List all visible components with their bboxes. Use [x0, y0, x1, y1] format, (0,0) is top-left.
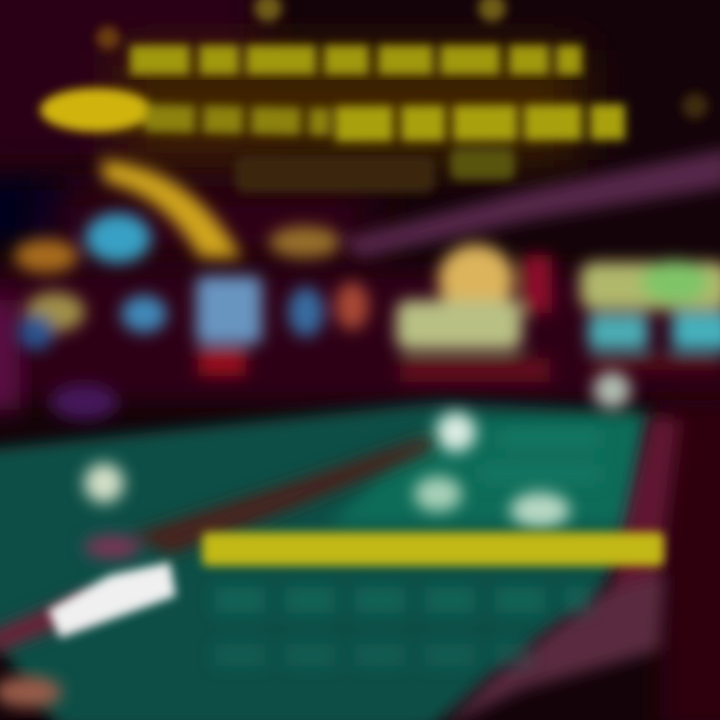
- green table felt: [0, 402, 650, 720]
- title line one, illegible blurred lettering: [96, 0, 582, 60]
- ceiling beam: [340, 148, 720, 258]
- white chips: [84, 371, 631, 528]
- left slot machines: [14, 213, 369, 420]
- bottom left chip: [0, 676, 62, 708]
- right slot machine: [580, 260, 720, 370]
- centre slot machine: [396, 244, 552, 382]
- yellow banner: [202, 532, 664, 566]
- gold swoosh: [100, 160, 341, 258]
- title line two, illegible blurred lettering: [40, 88, 708, 193]
- title glow backing: [120, 50, 580, 160]
- white glove hand: [48, 562, 176, 638]
- cue stick: [0, 435, 432, 655]
- table markings: [215, 430, 600, 655]
- table rail: [440, 415, 680, 720]
